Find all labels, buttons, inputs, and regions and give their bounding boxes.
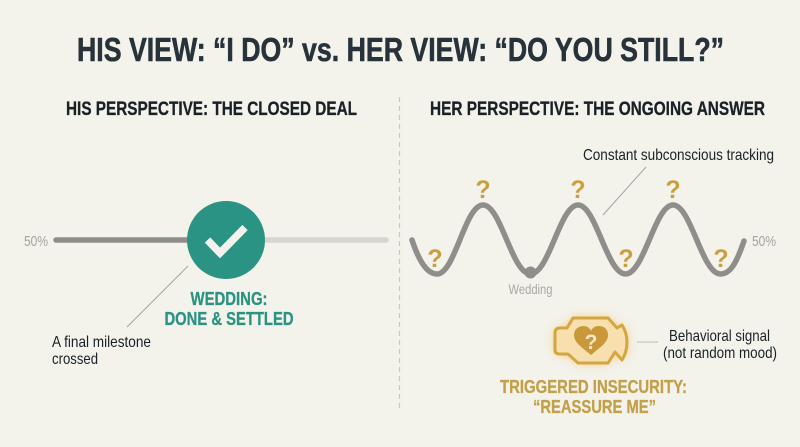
leader line: milestone [127,266,188,327]
icon: engine warning with heart: ? [585,331,597,354]
label: wedding done and settled: WEDDING: [190,288,268,309]
marker: wedding dot [524,266,536,278]
label: wedding done and settled: DONE & SETTLED [164,308,294,329]
question marks [427,176,729,273]
question marks: ? [427,245,443,273]
panel: her perspective [412,98,777,417]
callout: final milestone [52,334,151,368]
question marks: ? [713,245,729,273]
flat line chart [56,237,386,243]
question marks: ? [665,176,681,204]
callout: final milestone: A final milestone [52,334,151,351]
heading: his perspective: HIS PERSPECTIVE: THE CLOSED DEAL [66,98,357,120]
callout: final milestone: crossed [52,351,98,368]
question marks: ? [570,176,586,204]
callout: behavioral signal: (not random mood) [663,345,777,362]
label: 50% right: 50% [752,233,776,250]
label: triggered insecurity [500,376,687,417]
question marks: ? [475,176,491,204]
callout: behavioral signal: Behavioral signal [669,328,770,345]
label: 50% left: 50% [24,233,48,250]
leader line: tracking [603,167,646,215]
label: triggered insecurity: “REASSURE ME” [533,396,656,417]
callout: behavioral signal [663,328,777,362]
leader line: signal [637,341,658,343]
label: wedding: Wedding [508,281,552,297]
label: triggered insecurity: TRIGGERED INSECURITY: [500,376,687,397]
question marks: ? [618,245,634,273]
panel: his perspective [24,98,386,368]
icon: engine warning with heart [555,318,627,363]
icon: wedding check circle [187,201,265,279]
wave chart [412,205,744,274]
label: wedding done and settled [164,288,294,329]
